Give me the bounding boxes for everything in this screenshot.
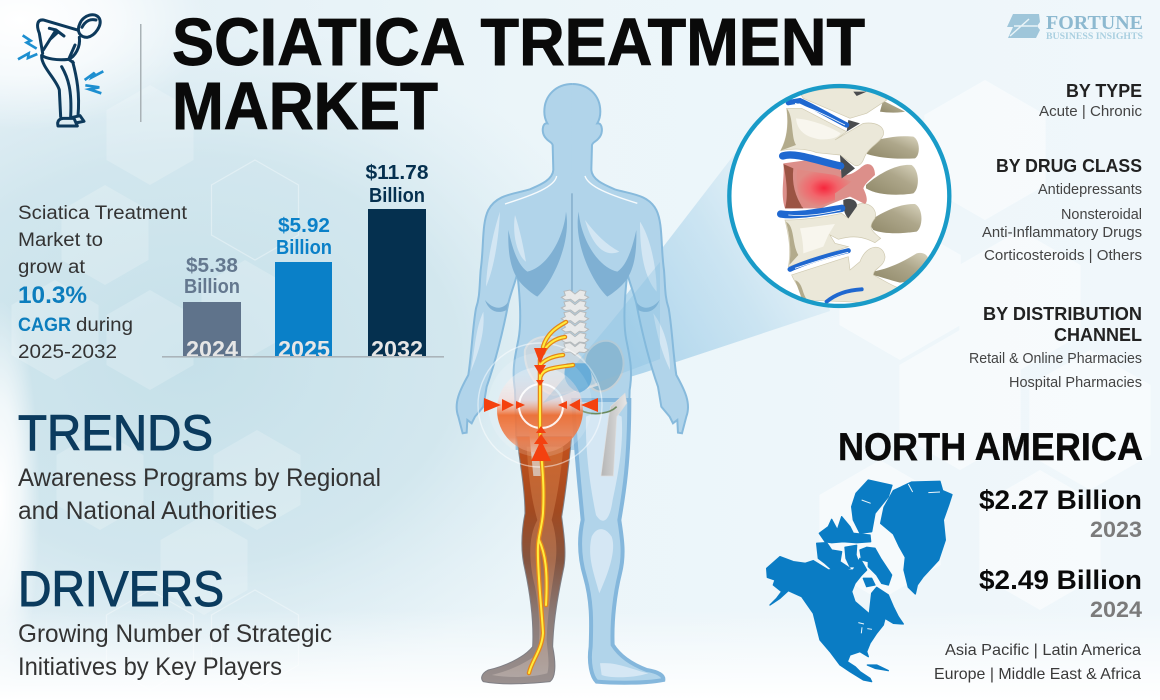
bar 2024: $5.38 <box>186 255 238 277</box>
zoom wedge from hip to spine circle <box>543 108 830 403</box>
bar 2032: 2032 <box>371 336 423 362</box>
herniated vertebra <box>783 160 875 208</box>
logo: Fortune Business Insights <box>1007 12 1143 42</box>
by distribution channel: Hospital Pharmacies <box>1009 375 1142 391</box>
bar 2032 <box>366 162 428 362</box>
spine vertebrae <box>561 290 589 355</box>
bar 2032: Billion <box>369 185 425 207</box>
value 2023: $2.27 Billion <box>979 485 1142 515</box>
bar 2025: 2025 <box>278 336 330 362</box>
bar 2024: 2024 <box>186 336 238 362</box>
vertebra bodies and arches <box>781 88 900 303</box>
growth text block: grow at <box>18 257 86 278</box>
by drug class: Corticosteroids | Others <box>984 248 1142 264</box>
drivers <box>18 561 332 681</box>
by type: Acute | Chronic <box>1039 104 1142 120</box>
by distribution channel: Retail & Online Pharmacies <box>969 351 1142 367</box>
pelvis <box>525 337 624 395</box>
logo: Fortune Business Insights: FORTUNE <box>1046 12 1143 34</box>
growth text block: during <box>76 315 133 336</box>
right leg <box>573 393 663 683</box>
bar chart: market size <box>162 162 444 362</box>
trends: TRENDS <box>18 405 213 461</box>
Mainland <box>767 557 903 682</box>
by type: BY TYPE <box>1066 80 1142 101</box>
Arctic islands <box>852 480 892 533</box>
other regions <box>934 642 1141 683</box>
pain arrows <box>484 348 598 461</box>
value 2023 <box>979 485 1142 542</box>
value 2024 <box>979 565 1143 622</box>
value 2023: 2023 <box>1090 517 1142 542</box>
growth text block: Sciatica Treatment <box>18 203 188 224</box>
lakes and fjords <box>858 484 940 633</box>
by drug class: Anti-Inflammatory Drugs <box>982 225 1142 241</box>
bar 2025: $5.92 <box>278 215 330 237</box>
map: North America and Greenland <box>767 480 952 682</box>
title divider <box>140 24 142 122</box>
by distribution channel <box>969 303 1142 391</box>
drivers: Growing Number of Strategic <box>18 620 332 648</box>
logo: Fortune Business Insights: BUSINESS INSIGHTS <box>1046 32 1143 42</box>
growth text block: 2025-2032 <box>18 342 117 363</box>
bar 2025: Billion <box>276 237 332 259</box>
other regions: Europe | Middle East & Africa <box>934 666 1141 683</box>
wedge overlay on the body <box>543 262 660 403</box>
growth text block: 10.3% <box>18 282 87 309</box>
growth text block <box>18 203 188 363</box>
regional heading: NORTH AMERICA <box>838 426 1143 469</box>
bar 2032: $11.78 <box>366 162 428 184</box>
by type <box>1039 80 1142 120</box>
bar 2025 <box>275 215 332 362</box>
value 2024: 2024 <box>1090 597 1143 622</box>
trends: Awareness Programs by Regional <box>18 464 381 492</box>
by drug class: BY DRUG CLASS <box>996 155 1142 176</box>
Greenland <box>881 481 952 594</box>
by drug class <box>982 155 1142 264</box>
trends <box>18 405 381 525</box>
spinal discs <box>781 101 862 302</box>
by distribution channel: BY DISTRIBUTION <box>983 303 1142 324</box>
sciatic nerve <box>529 322 573 673</box>
upper body <box>457 84 688 450</box>
painful left leg <box>482 423 572 684</box>
title <box>172 5 865 144</box>
human body illustration <box>457 84 688 684</box>
trends: and National Authorities <box>18 497 277 525</box>
by drug class: Antidepressants <box>1038 182 1142 198</box>
by drug class: Nonsteroidal <box>1061 207 1142 223</box>
nerve holes <box>840 92 867 218</box>
by distribution channel: CHANNEL <box>1054 324 1142 345</box>
value 2024: $2.49 Billion <box>979 565 1142 595</box>
icon: man with back pain <box>18 15 103 126</box>
drivers: Initiatives by Key Players <box>18 653 282 681</box>
drivers: DRIVERS <box>18 561 224 617</box>
bone highlights <box>796 118 841 253</box>
bar 2024 <box>183 255 241 362</box>
bone shading <box>781 108 807 300</box>
title: SCIATICA TREATMENT <box>172 5 865 80</box>
pain glow <box>478 343 602 467</box>
growth text block: Market to <box>18 230 103 251</box>
bar 2024: Billion <box>184 276 240 298</box>
transverse processes <box>866 101 928 283</box>
title: MARKET <box>172 69 438 144</box>
other regions: Asia Pacific | Latin America <box>945 642 1141 659</box>
circle inset: herniated spine <box>729 86 949 306</box>
growth text block: CAGR <box>18 315 71 336</box>
